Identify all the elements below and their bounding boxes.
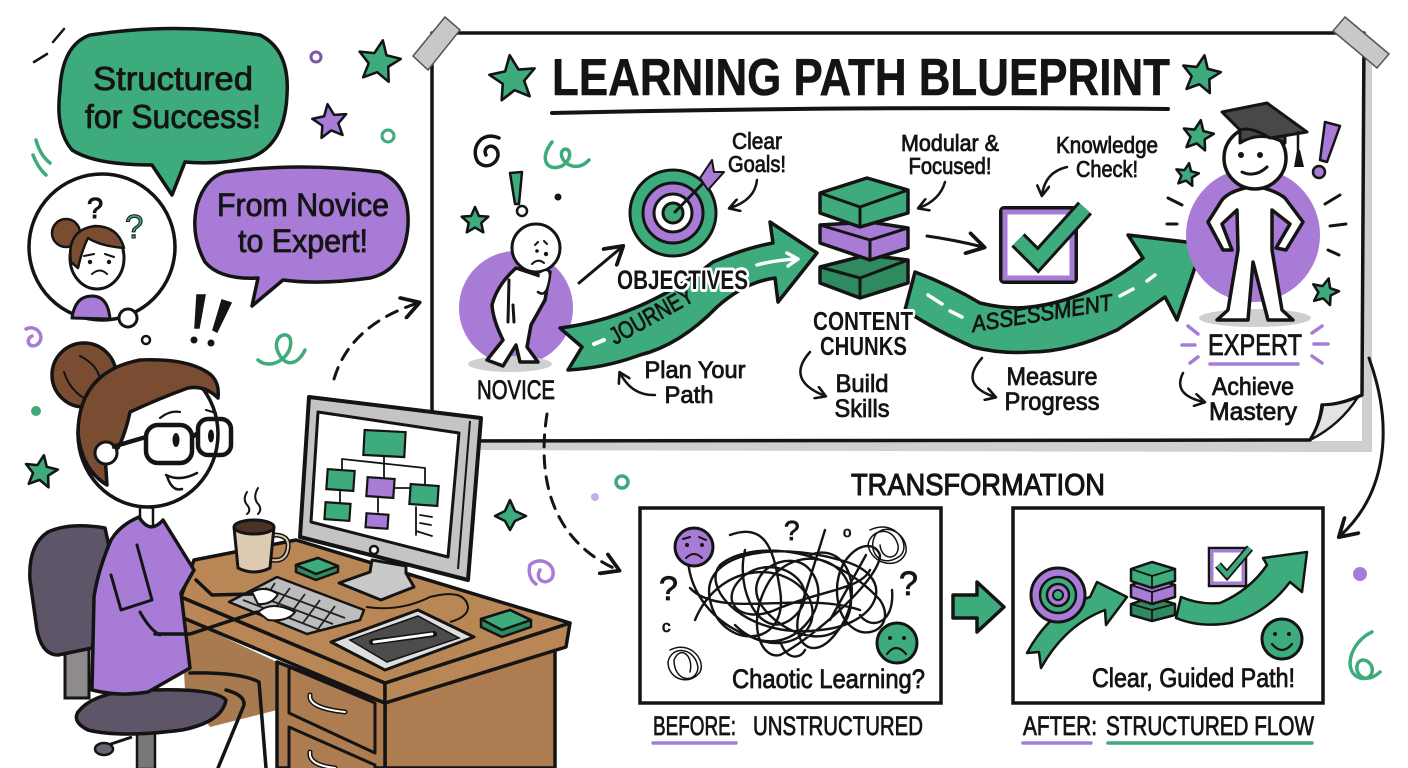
note: plan your path: Plan Your xyxy=(644,357,746,384)
note: clear goals: Clear xyxy=(732,128,782,154)
note: measure progress xyxy=(973,358,1100,416)
icon: spiral xyxy=(475,136,499,166)
icon: target xyxy=(1031,568,1085,622)
hands xyxy=(252,589,295,620)
heading: learning path blueprint: LEARNING PATH BLUEPRINT xyxy=(552,49,1170,107)
note: achieve mastery: Achieve xyxy=(1212,373,1294,401)
illustration: keyboard xyxy=(229,577,364,634)
icon: title star left xyxy=(487,52,538,101)
note: measure progress: Measure xyxy=(1006,363,1098,391)
illustration: coffee mug xyxy=(234,488,288,572)
expert accent marks xyxy=(1182,326,1328,364)
green sparks xyxy=(33,140,50,175)
speech bubble: structured for success: for Success! xyxy=(85,98,261,135)
banner arrow: assessment xyxy=(905,235,1203,352)
icon: purple exclamation xyxy=(1313,122,1340,178)
thought bubble: confused learner: ? xyxy=(87,193,103,225)
arms xyxy=(155,580,257,634)
head xyxy=(78,361,218,507)
hair bun xyxy=(52,343,116,407)
label: after structured flow: AFTER: xyxy=(1023,711,1097,741)
hair xyxy=(78,360,218,485)
icon: sad purple face xyxy=(675,528,713,566)
icon: novice exclamation xyxy=(510,172,527,216)
icon: sad green face xyxy=(877,623,917,663)
label: before unstructured: BEFORE: xyxy=(653,711,736,741)
cable xyxy=(366,594,468,622)
note: plan your path xyxy=(620,357,746,409)
icon: content chunks blocks xyxy=(820,178,908,298)
illustration: tablet and stylus xyxy=(331,610,474,670)
icon: knowledge checkbox xyxy=(1001,208,1085,282)
flow arrow two xyxy=(1176,552,1307,625)
illustration: chair xyxy=(30,526,226,768)
label: before unstructured xyxy=(653,711,923,743)
dot xyxy=(554,194,562,200)
steam xyxy=(245,488,260,514)
arrow: before to after xyxy=(953,582,1004,632)
decorative sparks top left xyxy=(34,29,64,62)
note: build skills: Skills xyxy=(834,395,890,423)
icon: checkbox xyxy=(1209,548,1250,586)
expert figure xyxy=(1186,103,1320,327)
note: achieve mastery: Mastery xyxy=(1209,398,1297,426)
eyes and mouth xyxy=(160,410,216,489)
arrow: chunks to check xyxy=(927,236,983,247)
label: before unstructured: UNSTRUCTURED xyxy=(753,711,923,741)
legs xyxy=(190,673,266,768)
thought bubble: confused learner: ? xyxy=(125,208,143,245)
illustration: desk xyxy=(181,540,570,768)
exclamation marks xyxy=(190,295,231,346)
flow arrow one xyxy=(1027,582,1127,668)
illustration: monitor xyxy=(300,397,481,600)
note: build skills xyxy=(800,352,890,423)
label: after structured flow xyxy=(1023,711,1314,743)
note: knowledge check: Knowledge xyxy=(1056,132,1158,158)
question marks: ? xyxy=(899,565,918,603)
tape: top left xyxy=(413,17,460,70)
label: objectives: OBJECTIVES xyxy=(617,265,748,295)
label: content chunks: CHUNKS xyxy=(820,331,907,361)
question marks: o xyxy=(843,524,851,541)
banner label: assessment: ASSESSMENT xyxy=(968,289,1116,337)
caption: chaotic learning: Chaotic Learning? xyxy=(732,664,925,694)
note: clear goals xyxy=(728,128,786,208)
icon: green sticky pad small xyxy=(296,558,338,580)
icon: green sticky pad large xyxy=(481,610,531,637)
note: knowledge check xyxy=(1042,132,1158,195)
speech bubble: from novice to expert: From Novice xyxy=(217,187,389,223)
caption: clear guided path: Clear, Guided Path! xyxy=(1092,663,1295,693)
panel: after structured flow xyxy=(1013,508,1323,703)
icon: blocks xyxy=(1131,562,1175,621)
ear xyxy=(95,442,117,464)
label: after structured flow: STRUCTURED FLOW xyxy=(1106,711,1314,741)
note: modular and focused xyxy=(901,130,999,208)
speech bubble: structured for success xyxy=(59,28,287,195)
question marks xyxy=(659,515,918,636)
shirt xyxy=(92,517,194,694)
novice figure xyxy=(459,224,573,372)
label: content chunks: CONTENT xyxy=(813,306,913,336)
icon: novice star xyxy=(462,207,488,232)
icon: graduation cap xyxy=(1222,103,1307,167)
heading underline xyxy=(552,108,1168,113)
illustration: learner at desk xyxy=(52,343,295,768)
arrow: novice to objectives xyxy=(579,247,622,283)
note: build skills: Build xyxy=(836,370,888,398)
arrow: blueprint to after xyxy=(1340,358,1383,536)
label: expert: EXPERT xyxy=(1208,329,1302,362)
note: knowledge check: Check! xyxy=(1076,156,1138,182)
icon: expert stars xyxy=(1174,118,1341,306)
question marks: ? xyxy=(784,515,800,546)
tape: top right xyxy=(1333,17,1389,68)
question marks: ? xyxy=(659,570,678,608)
banner label: journey: JOURNEY xyxy=(605,282,698,350)
neck xyxy=(140,505,153,536)
speech bubble: from novice to expert xyxy=(195,167,408,306)
note: clear goals: Goals! xyxy=(728,151,786,177)
note: modular and focused: Modular & xyxy=(901,130,999,156)
label: novice: NOVICE xyxy=(477,375,555,405)
small scribble top right xyxy=(868,527,906,563)
dashed arrow: novice to before xyxy=(544,414,618,570)
banner arrow: journey xyxy=(560,222,817,370)
note: measure progress: Progress xyxy=(1004,388,1100,416)
icon: title star right xyxy=(1179,52,1223,94)
icon: happy face xyxy=(1262,619,1302,659)
note: plan your path: Path xyxy=(664,382,714,409)
note: modular and focused: Focused! xyxy=(908,153,992,179)
note: achieve mastery xyxy=(1180,373,1297,426)
question marks: c xyxy=(662,617,671,636)
speech bubble: structured for success: Structured xyxy=(93,60,253,97)
dashed arrow: to blueprint xyxy=(334,303,418,379)
icon: target xyxy=(630,160,724,256)
icon: green squiggle xyxy=(545,142,589,168)
label: content chunks xyxy=(813,306,913,361)
thought bubble: confused learner xyxy=(29,174,175,344)
screen: flowchart xyxy=(324,430,439,536)
glasses xyxy=(112,419,231,463)
small scribble bottom left xyxy=(668,647,701,680)
panel: before unstructured xyxy=(640,508,941,703)
expert rays xyxy=(1167,195,1346,255)
chart: tangled scribble xyxy=(688,530,892,657)
speech bubble: from novice to expert: to Expert! xyxy=(238,223,368,259)
heading: transformation: TRANSFORMATION xyxy=(851,467,1105,502)
